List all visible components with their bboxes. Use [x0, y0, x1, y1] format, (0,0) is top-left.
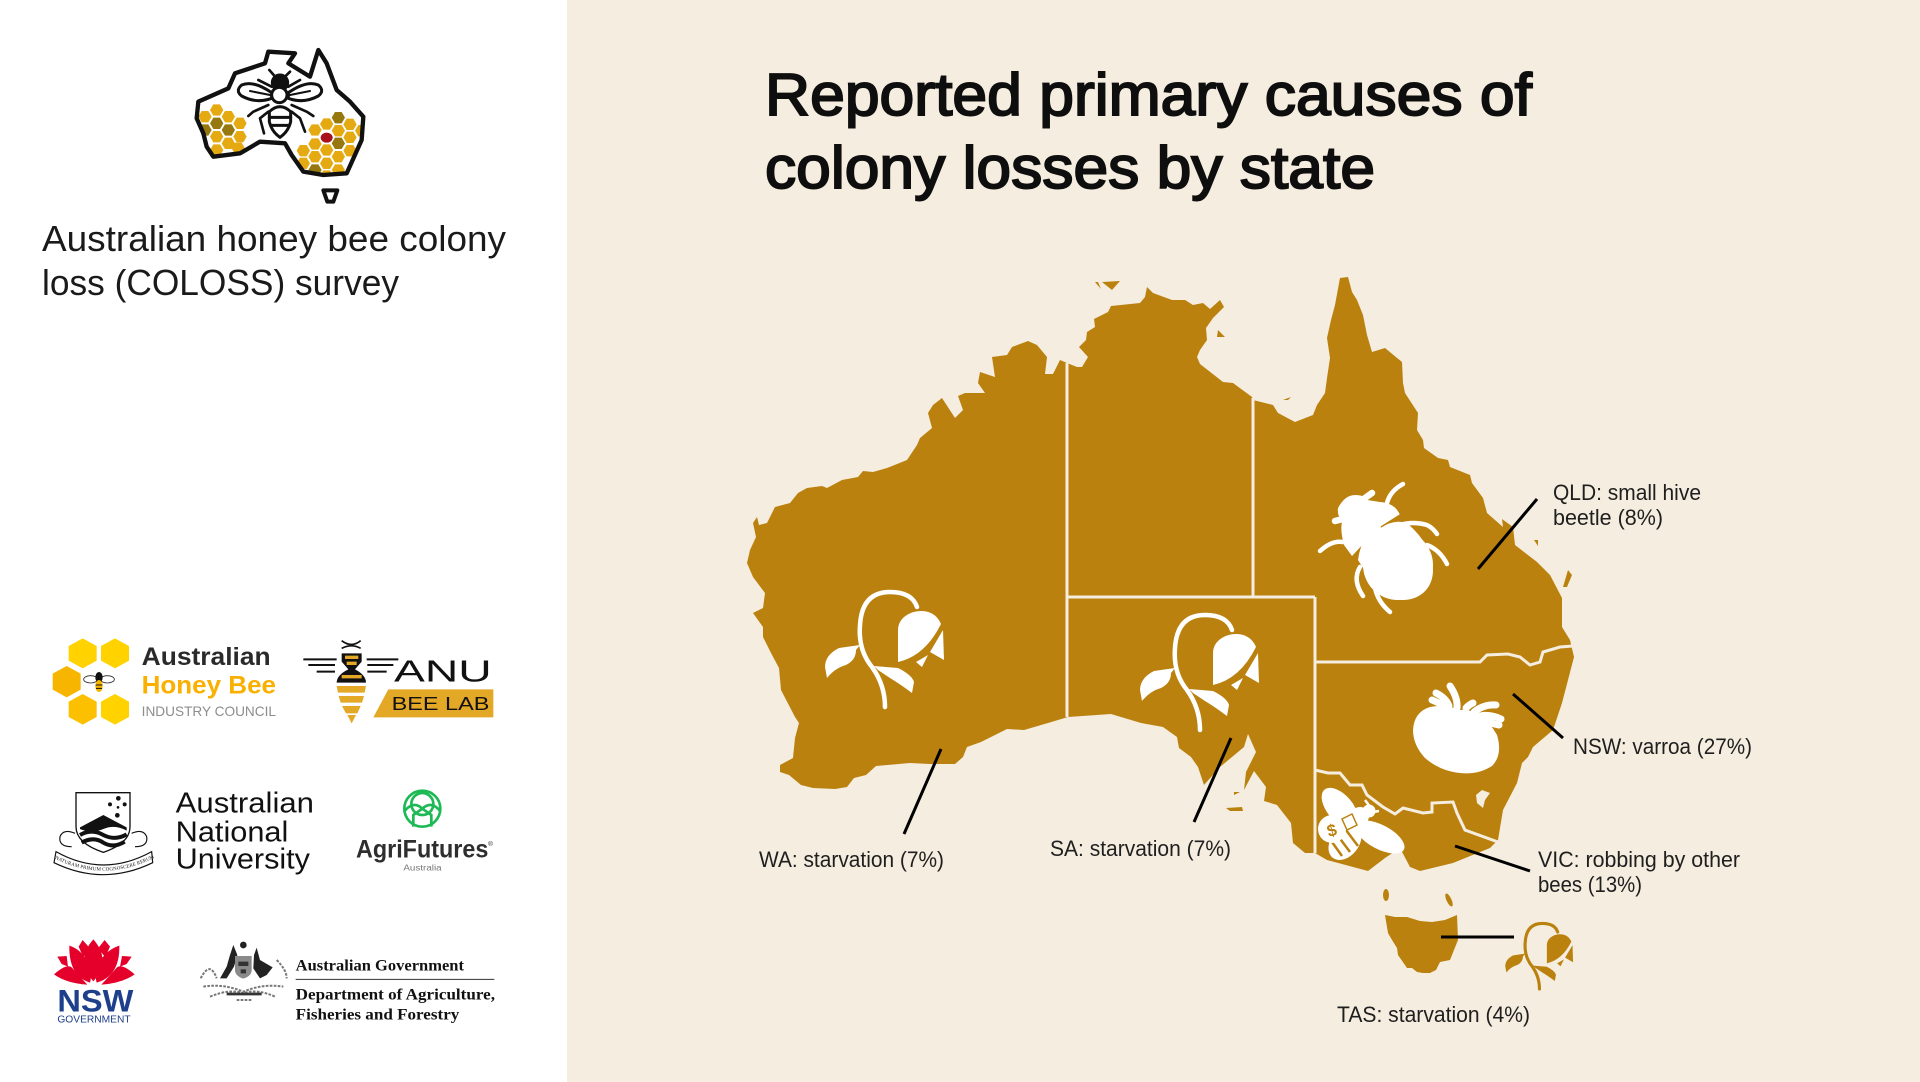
callout: NSW: NSW: varroa (27%) — [1573, 734, 1752, 759]
callout: WA — [759, 749, 944, 872]
logo: Australian National University: NATURAM PRIMUM COGNOSCERE RERUM — [55, 854, 154, 871]
logo: Australian National University — [53, 788, 314, 876]
callout: SA — [1050, 738, 1231, 861]
logo: Australian National University: National — [176, 817, 288, 849]
logo: Australian Government Department of Agriculture, Fisheries and Forestry: Fisheries and Forestry — [296, 1006, 460, 1023]
logo: AgriFutures Australia: ® — [488, 840, 493, 848]
logo: Australian Government Department of Agriculture, Fisheries and Forestry — [201, 942, 495, 1023]
logo: AgriFutures Australia: AgriFutures — [356, 835, 488, 863]
icon: robbing bee VIC — [1315, 781, 1409, 866]
logo: ANU Bee Lab: ANU — [394, 655, 492, 689]
logo: Australian Government Department of Agriculture, Fisheries and Forestry: Department of Agriculture, — [296, 986, 495, 1003]
islands — [1095, 281, 1572, 811]
logo: NSW Government — [54, 939, 135, 1026]
callout: TAS: TAS: starvation (4%) — [1337, 1002, 1530, 1027]
map: Australia by state — [747, 277, 1574, 973]
icon: wilted flower SA — [1140, 615, 1259, 730]
callout: QLD: QLD: small hive — [1553, 480, 1701, 505]
icon: small hive beetle QLD — [1320, 484, 1447, 612]
callout: SA: SA: starvation (7%) — [1050, 836, 1231, 861]
title: Reported primary causes of — [765, 62, 1533, 128]
background: cream panel — [567, 0, 1920, 1082]
state borders — [1067, 363, 1573, 853]
logo: Australian Government Department of Agriculture, Fisheries and Forestry: Australian Government — [296, 958, 465, 975]
panel: white sidebar — [0, 0, 567, 1082]
icon: wilted flower WA — [825, 592, 944, 707]
callout: NSW — [1513, 694, 1752, 759]
logo: NSW Government: NSW — [57, 984, 134, 1019]
lake — [1476, 790, 1490, 808]
icon: wilted flower TAS — [1505, 923, 1573, 989]
logo: Australian Honey Bee Industry Council: Australian — [142, 644, 271, 671]
logo: Australian National University: Australian — [176, 788, 314, 820]
logo: Australian Honey Bee Industry Council: INDUSTRY COUNCIL — [142, 703, 276, 719]
callout: VIC: VIC: robbing by other — [1538, 847, 1740, 872]
icon: varroa mite NSW — [1413, 686, 1501, 773]
subtitle: survey name — [42, 218, 506, 303]
Tasmania — [1385, 915, 1458, 973]
logo: ANU Bee Lab — [303, 641, 493, 723]
subtitle: survey name: Australian honey bee colony — [42, 218, 506, 259]
callout: VIC — [1455, 846, 1740, 897]
title: colony losses by state — [765, 135, 1375, 201]
subtitle: survey name: loss (COLOSS) survey — [42, 262, 399, 303]
callout: QLD — [1478, 480, 1701, 569]
callout: VIC: bees (13%) — [1538, 872, 1642, 897]
icon: robbing bee VIC: $ — [1325, 820, 1339, 841]
logo: NSW Government: GOVERNMENT — [57, 1015, 131, 1026]
logo: Australian National University: University — [176, 843, 311, 875]
title — [765, 62, 1533, 201]
callout: WA: WA: starvation (7%) — [759, 847, 944, 872]
logo: AgriFutures Australia: Australia — [403, 863, 442, 873]
mainland — [747, 277, 1574, 871]
callout: QLD: beetle (8%) — [1553, 505, 1663, 530]
logo: AgriFutures Australia — [356, 791, 493, 873]
logo: ANU Bee Lab: BEE LAB — [392, 693, 489, 714]
logo: Australian Honey Bee Industry Council — [53, 638, 276, 725]
logo: Australian Honey Bee Industry Council: Honey Bee — [142, 672, 276, 699]
logo: COLOSS survey Australia bee — [197, 50, 368, 202]
